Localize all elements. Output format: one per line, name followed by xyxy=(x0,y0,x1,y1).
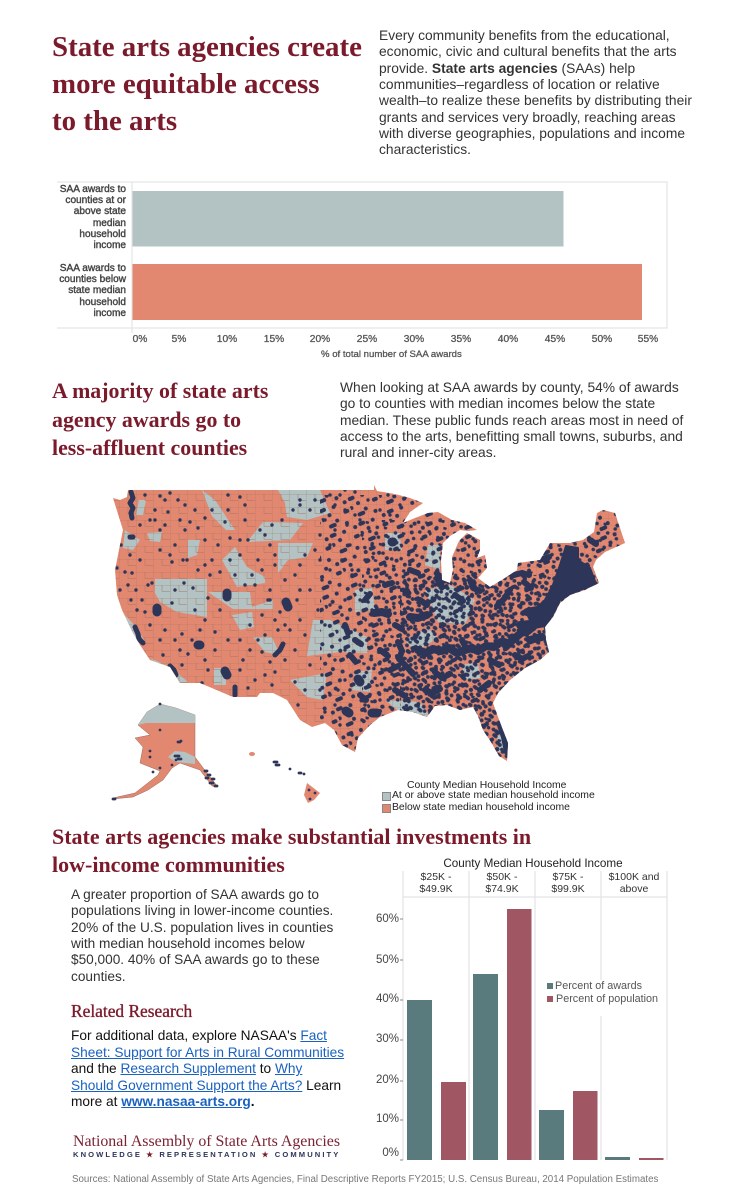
x axis labels: 25% xyxy=(357,334,377,345)
bar label: at or above: SAA awards to xyxy=(60,184,126,195)
legend swatch: below xyxy=(382,804,391,813)
bar label: at or above: household xyxy=(79,229,126,240)
legend swatch: awards xyxy=(547,983,553,989)
column chart: awards vs population by income xyxy=(400,871,668,1160)
bars: percent of population xyxy=(441,909,664,1160)
column headers: above xyxy=(620,883,648,895)
paragraph: lower-income counties: A greater proportion of SAA awards go to xyxy=(71,887,319,902)
x axis labels: 15% xyxy=(264,334,284,345)
y axis labels: 50% xyxy=(376,954,399,966)
legend swatch: population xyxy=(547,996,553,1002)
heading: majority of awards xyxy=(52,378,268,460)
paragraph: awards by county: rural and inner-city areas. xyxy=(340,445,496,460)
x axis labels: 40% xyxy=(498,334,518,345)
title xyxy=(52,31,362,137)
intro text: provide. State arts agencies (SAAs) help xyxy=(379,61,635,76)
title: State arts agencies create xyxy=(52,31,362,63)
related research text: For additional data, explore NASAA's Fact xyxy=(71,1028,327,1043)
paragraph: awards by county: When looking at SAA awards by county, 54% of awards xyxy=(340,380,679,395)
bar label: below: household xyxy=(79,297,126,308)
bar label: at or above: income xyxy=(93,240,126,251)
paragraph: lower-income counties: 20% of the U.S. population lives in counties xyxy=(71,920,333,935)
bar: at or above median xyxy=(132,191,564,246)
y axis labels xyxy=(376,913,399,1159)
intro text: Every community benefits from the educational, xyxy=(379,28,670,43)
contiguous states with county fill xyxy=(113,485,625,761)
intro text: wealth–to realize these benefits by distributing their xyxy=(379,93,692,108)
x axis labels xyxy=(132,334,658,360)
x axis labels: 55% xyxy=(638,334,658,345)
bar label: at or above xyxy=(60,184,126,251)
y axis labels: 30% xyxy=(376,1033,399,1045)
paragraph: awards by county xyxy=(340,380,684,460)
map legend: At or above state median household income xyxy=(392,790,595,801)
heading: majority of awards: A majority of state arts xyxy=(52,378,268,403)
x axis labels: 20% xyxy=(310,334,330,345)
heading: related research: Related Research xyxy=(71,1001,192,1021)
related research text: Sheet: Support for Arts in Rural Communities xyxy=(71,1044,344,1060)
heading: majority of awards: less-affluent counties xyxy=(52,435,247,460)
intro text: grants and services very broadly, reaching areas xyxy=(379,110,676,125)
paragraph: lower-income counties xyxy=(71,887,333,984)
related research text: more at www.nasaa-arts.org. xyxy=(71,1094,255,1109)
logo: NASAA: National Assembly of State Arts Agencies xyxy=(73,1133,340,1150)
y axis labels: 0% xyxy=(382,1147,399,1159)
intro text xyxy=(379,28,692,157)
related research text: and the Research Supplement to Why xyxy=(71,1061,302,1076)
bar: below median xyxy=(132,264,642,320)
column headers: $25K - xyxy=(421,871,451,883)
x axis labels: 30% xyxy=(404,334,424,345)
logo: NASAA xyxy=(73,1133,340,1159)
column headers: $99.9K xyxy=(551,883,585,895)
paragraph: lower-income counties: counties. xyxy=(71,969,126,984)
x axis labels: 50% xyxy=(592,334,612,345)
heading: low-income communities xyxy=(52,824,531,877)
related research text: Should Government Support the Arts? Learn xyxy=(71,1078,341,1092)
related research text xyxy=(71,1028,344,1109)
column headers: $49.9K xyxy=(419,883,453,895)
heading: low-income communities: low-income communities xyxy=(52,852,285,877)
chart legend: Percent of population xyxy=(556,993,658,1005)
Hawaii xyxy=(249,752,320,803)
intro text: with diverse geographies, populations and income xyxy=(379,126,685,141)
map legend: Below state median household income xyxy=(392,802,570,813)
sources: Sources: National Assembly of State Arts Agencies, Final Descriptive Reports FY2015; U.S. Census Bureau, 2014 Population Estimates xyxy=(72,1174,658,1185)
bar chart: share of awards by county income xyxy=(57,182,668,333)
county award dots and metro clusters xyxy=(130,492,596,752)
title: more equitable access xyxy=(52,68,319,100)
Alaska xyxy=(113,704,218,799)
bar label: below: SAA awards to xyxy=(60,263,126,274)
map: awards by county income xyxy=(112,485,625,803)
x axis labels: 5% xyxy=(172,334,186,345)
x axis labels: % of total number of SAA awards xyxy=(321,349,462,360)
bar label: at or above: above state xyxy=(74,206,126,217)
bar label: at or above: counties at or xyxy=(65,195,126,206)
paragraph: awards by county: go to counties with median incomes below the state xyxy=(340,396,655,411)
map legend xyxy=(382,780,595,813)
intro text: communities–regardless of location or relative xyxy=(379,77,660,92)
chart title: County Median Household Income xyxy=(443,857,623,870)
column headers: $75K - xyxy=(553,871,583,883)
column headers: $100K and xyxy=(609,871,659,883)
column headers: $50K - xyxy=(487,871,517,883)
column headers xyxy=(419,871,659,895)
paragraph: lower-income counties: $50,000. 40% of SAA awards go to these xyxy=(71,952,320,967)
intro text: economic, civic and cultural benefits that the arts xyxy=(379,44,677,59)
legend swatch: at or above xyxy=(382,792,391,801)
paragraph: awards by county: access to the arts, benefitting small towns, suburbs, and xyxy=(340,429,683,444)
bar label: at or above: median xyxy=(93,218,126,229)
intro text: characteristics. xyxy=(379,142,471,157)
paragraph: lower-income counties: populations living in lower-income counties. xyxy=(71,903,333,918)
x axis labels: 35% xyxy=(451,334,471,345)
bar label: below: income xyxy=(93,308,126,319)
logo: NASAA: KNOWLEDGE ★ REPRESENTATION ★ COMMUNITY xyxy=(73,1150,340,1159)
paragraph: awards by county: median. These public funds reach areas most in need of xyxy=(340,413,683,428)
heading: majority of awards: agency awards go to xyxy=(52,406,241,432)
bars: percent of awards xyxy=(407,974,630,1160)
chart legend xyxy=(547,980,663,1016)
y axis labels: 40% xyxy=(376,993,399,1005)
x axis labels: 10% xyxy=(217,334,237,345)
map legend: County Median Household Income xyxy=(407,780,566,791)
column headers: $74.9K xyxy=(485,883,519,895)
bar label: below: state median xyxy=(68,285,126,296)
bar label: below xyxy=(59,263,126,319)
y axis labels: 20% xyxy=(376,1074,399,1086)
x axis labels: 45% xyxy=(545,334,565,345)
paragraph: lower-income counties: with median household incomes below xyxy=(71,936,305,951)
bar label: below: counties below xyxy=(59,274,126,285)
x axis labels: 0% xyxy=(133,334,147,345)
title: to the arts xyxy=(52,105,177,137)
y axis labels: 10% xyxy=(376,1113,399,1125)
heading: low-income communities: State arts agencies make substantial investments in xyxy=(52,824,531,849)
chart legend: Percent of awards xyxy=(555,980,642,992)
y axis labels: 60% xyxy=(376,913,399,925)
